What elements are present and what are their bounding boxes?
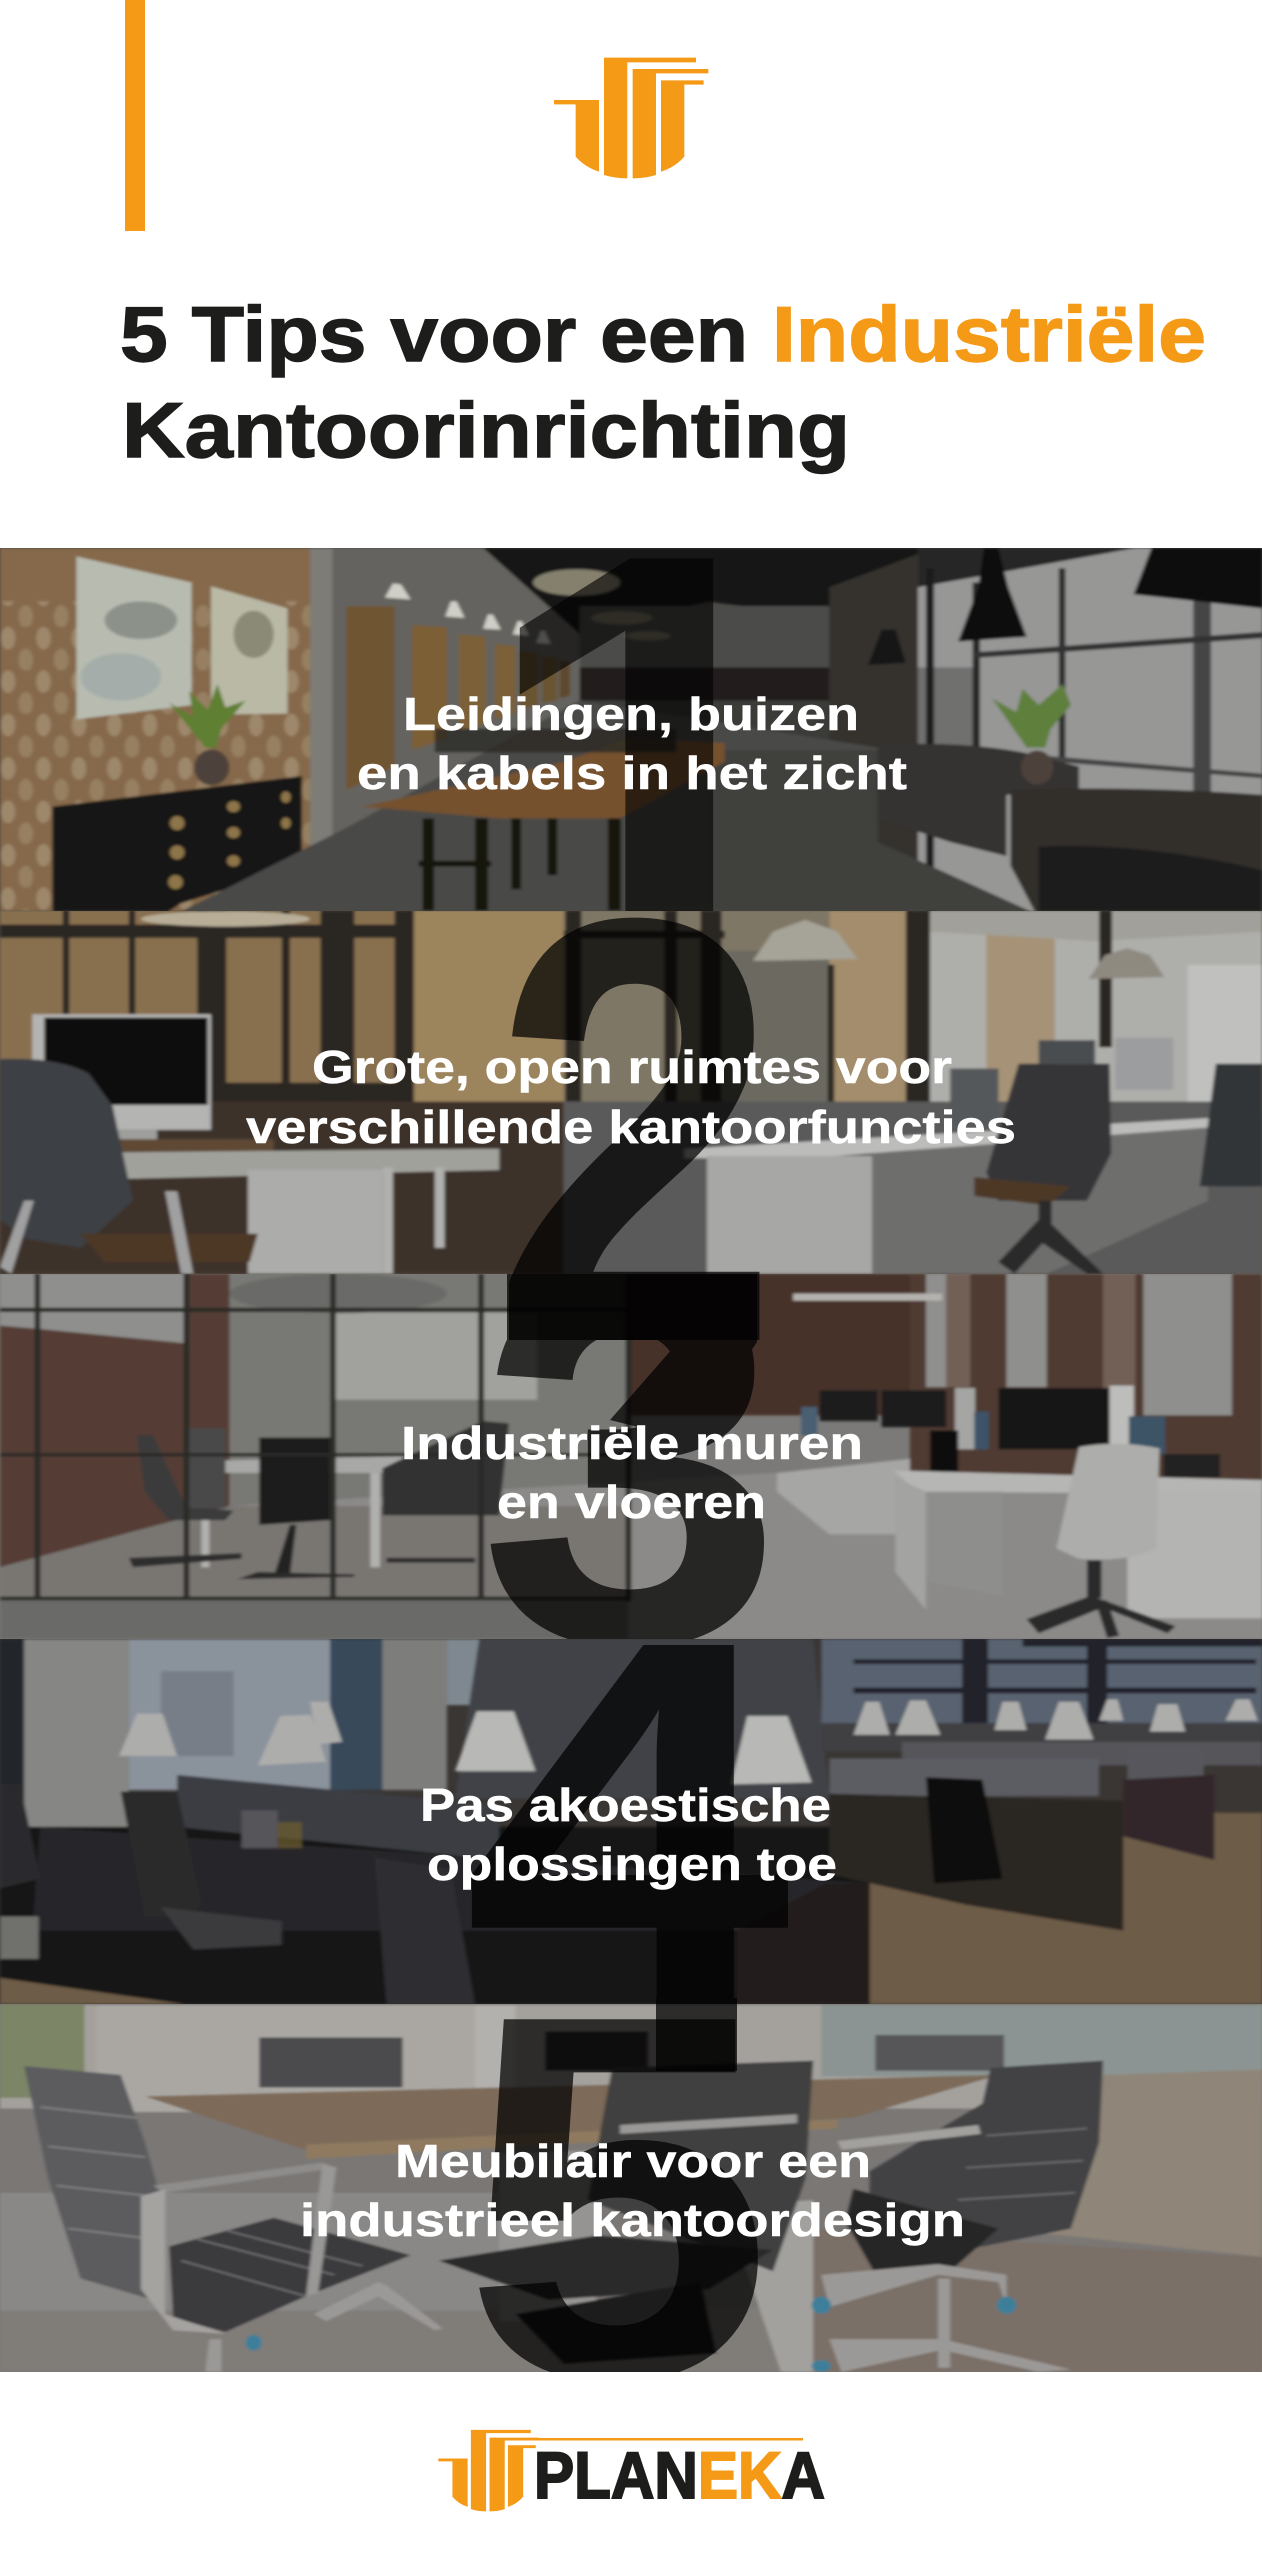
numeral 3: 3 <box>478 1166 784 1753</box>
tip 5 text <box>300 2135 965 2246</box>
title: 5 Tips voor een Industriële <box>120 290 1206 378</box>
numeral 5: 5 <box>462 1906 773 2488</box>
tip 1 text <box>357 688 907 799</box>
panel 1 photo: industrial café office with exposed ducts <box>0 548 1262 913</box>
title: Kantoorinrichting <box>122 386 850 474</box>
footer logo: Planeka <box>438 2430 825 2512</box>
numeral 1: 1 <box>476 424 832 1117</box>
icon: Planeka logo mark <box>554 58 708 178</box>
numeral 4: 4 <box>463 1534 795 2110</box>
numeral 2: 2 <box>491 792 780 1469</box>
tip 2 text <box>246 1041 1016 1153</box>
tip 4 text: Pas akoestische <box>420 1779 831 1831</box>
footer logo rule <box>520 2438 803 2440</box>
numeral 3 <box>490 1274 764 1639</box>
tip 4 text: oplossingen toe <box>427 1838 837 1890</box>
tip 2 text: Grote, open ruimtes voor <box>312 1041 952 1093</box>
tip 3 text <box>401 1417 863 1528</box>
tip 4 text <box>420 1779 837 1890</box>
tip 2 text: verschillende kantoorfuncties <box>246 1101 1016 1153</box>
tip 1 text: en kabels in het zicht <box>357 747 907 799</box>
orange accent bar <box>125 0 145 231</box>
icon: footer logo mark <box>438 2430 539 2511</box>
panel 2 photo: open office with brick wall and steel windows <box>0 910 1262 1274</box>
tip 3 text: Industriële muren <box>401 1417 863 1469</box>
footer logo wordmark: PLANEKA <box>534 2438 825 2512</box>
tip 5 text: Meubilair voor een <box>395 2135 871 2187</box>
title <box>120 290 1206 474</box>
panel 4 photo: office with desk lamps and acoustic partitions <box>0 1639 1262 2004</box>
panel 5 photo: meeting table with ribbed office chairs <box>0 2004 1262 2372</box>
panel 3 photo: office with glass meeting room and brick walls <box>0 1274 1262 1639</box>
tip 5 text: industrieel kantoordesign <box>300 2194 965 2246</box>
tip 1 text: Leidingen, buizen <box>403 688 859 740</box>
tip 3 text: en vloeren <box>497 1476 766 1528</box>
